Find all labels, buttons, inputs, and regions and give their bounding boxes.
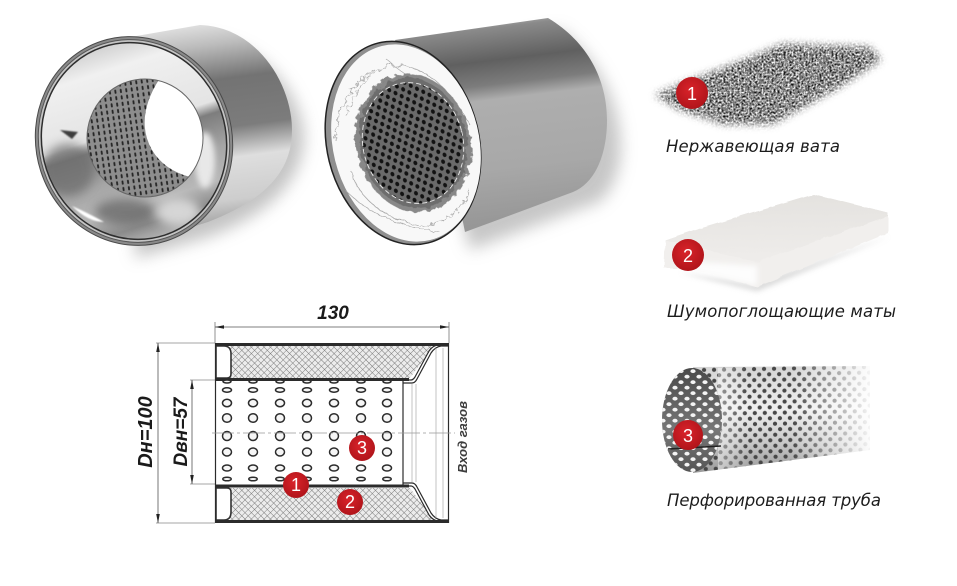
badge 1 <box>676 77 708 109</box>
outer casing and inlet cone <box>215 343 449 523</box>
label: gas inlet: Вход газов <box>455 401 470 473</box>
badge 3: 3 <box>357 438 367 458</box>
end cap pockets <box>216 346 231 520</box>
dimension: outer diameter <box>135 343 215 523</box>
badge 1: 1 <box>291 475 301 495</box>
dimension: outer diameter: Dн=100 <box>135 396 157 468</box>
badge 3 <box>349 435 375 461</box>
perforation holes <box>222 380 392 481</box>
caption: Перфорированная труба <box>667 491 881 510</box>
dimension: length 130: 130 <box>317 303 349 324</box>
badge 1 <box>283 472 309 498</box>
insulation mats <box>230 346 434 520</box>
badge 2 <box>337 489 363 515</box>
photo: cutaway muffler <box>304 18 621 261</box>
dimension: length 130 <box>215 303 449 343</box>
badge 2 <box>672 239 704 271</box>
dimension: inner diameter: Dвн=57 <box>171 396 192 466</box>
caption: Нержавеющая вата <box>666 137 840 156</box>
badge 2: 2 <box>345 492 355 512</box>
dimension: inner diameter <box>171 380 215 484</box>
material: stainless wool <box>655 44 881 156</box>
badge 1: 1 <box>687 84 697 104</box>
material: sound-absorbing mat <box>664 194 896 321</box>
photo: assembled muffler <box>34 25 312 263</box>
badge 3 <box>673 420 703 450</box>
badge 2: 2 <box>683 246 693 266</box>
caption: Шумопоглощающие маты <box>667 302 896 321</box>
diagram: muffler cross-section <box>135 303 470 523</box>
badge 3: 3 <box>683 426 693 446</box>
material: perforated tube <box>662 366 881 510</box>
